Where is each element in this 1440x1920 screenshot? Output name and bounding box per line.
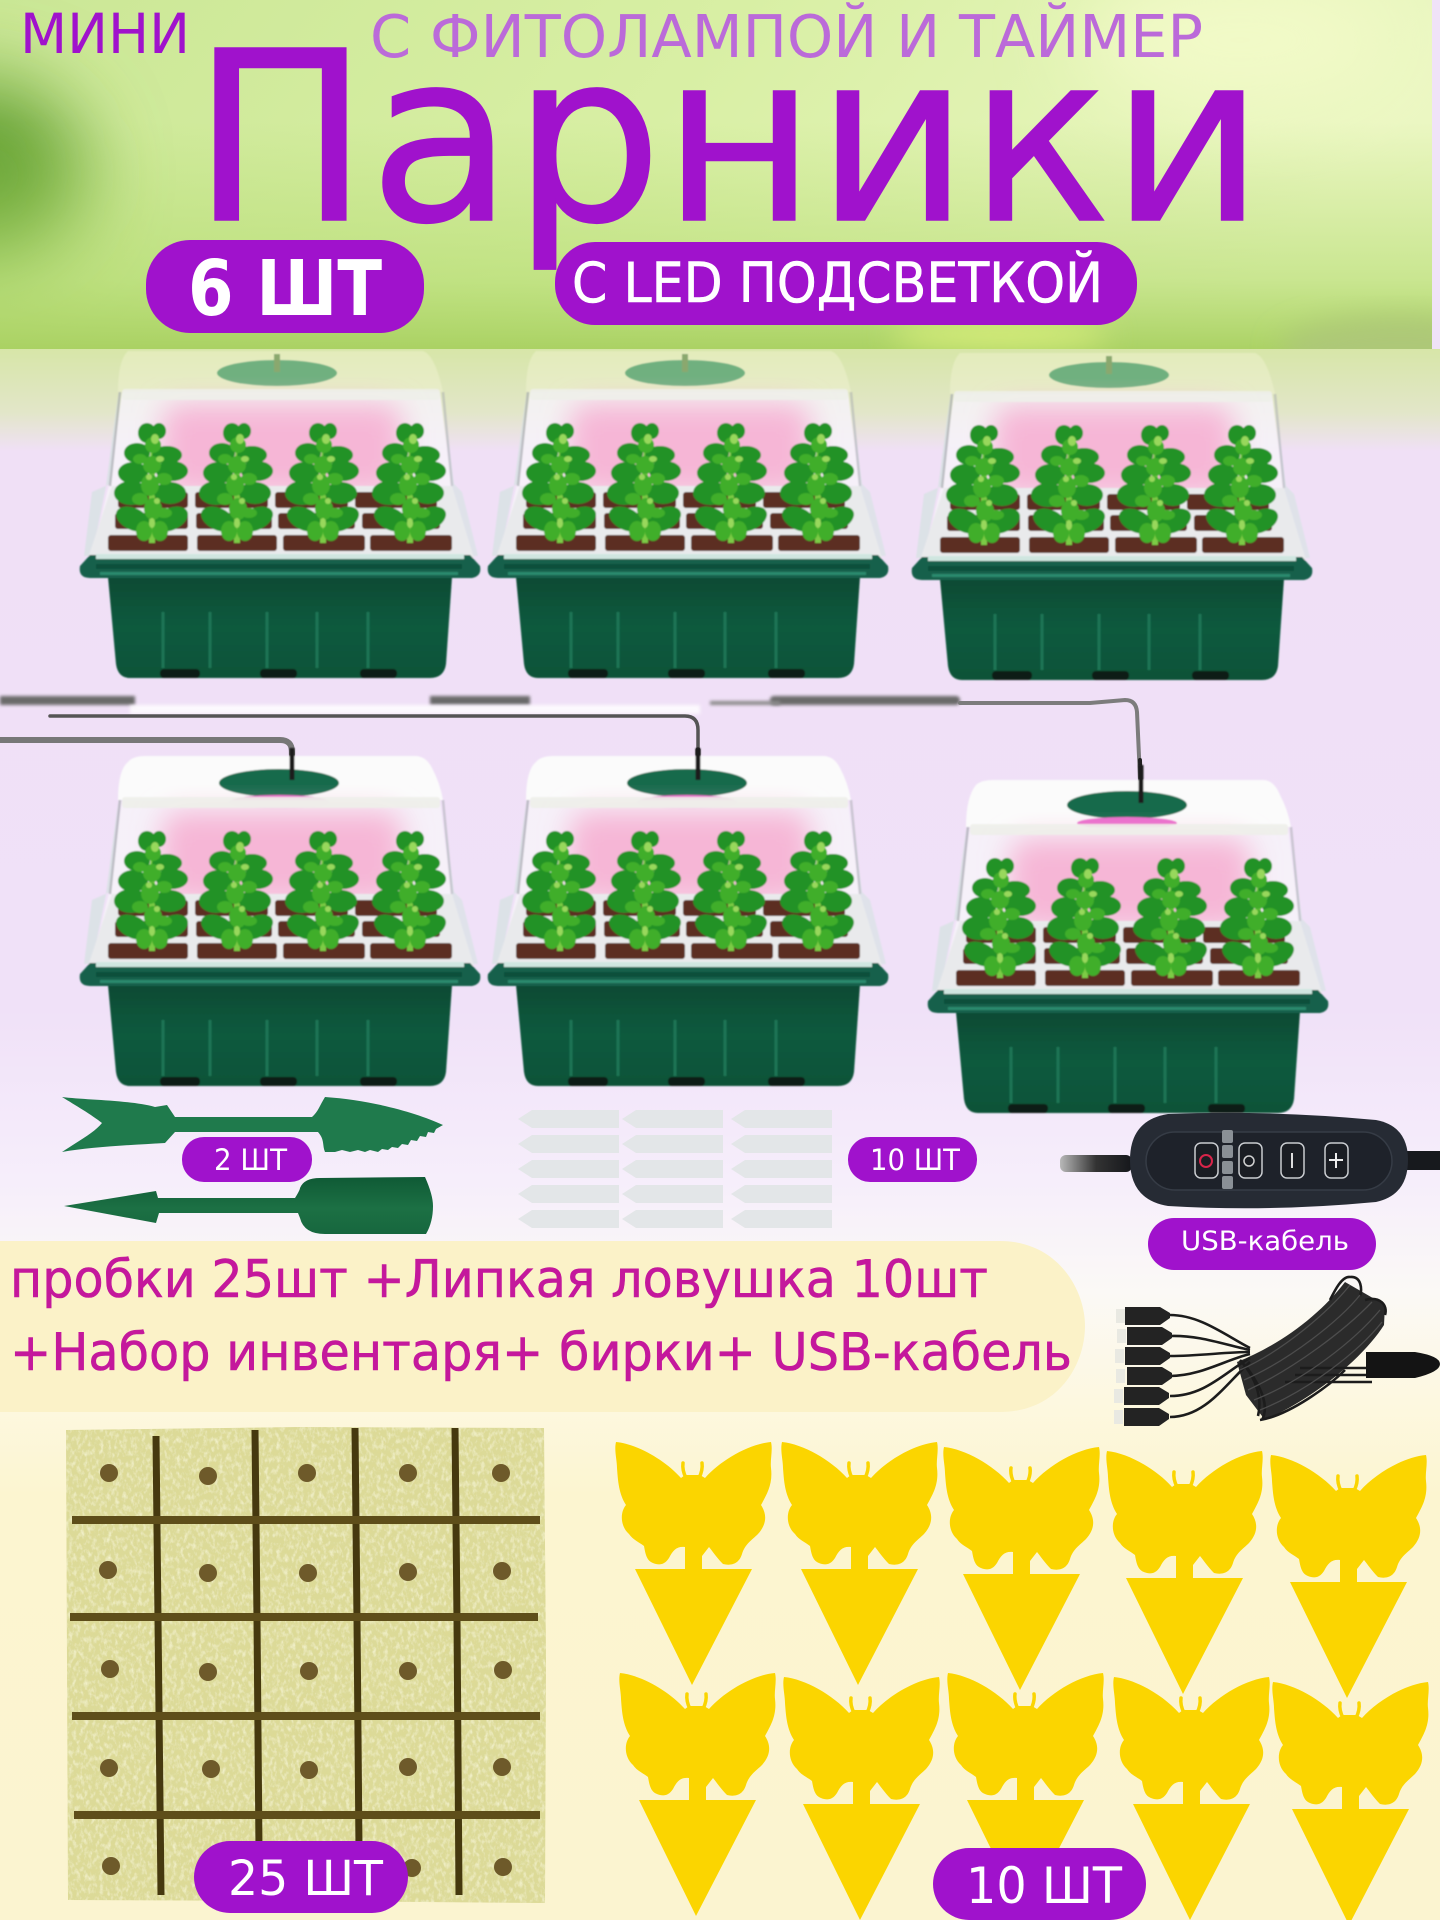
badge: 10 шт traps: 10 ШТ xyxy=(966,1857,1122,1915)
badge: usb-кабель xyxy=(1148,1218,1376,1270)
greenhouse 5 xyxy=(488,748,888,1086)
text panel: kit contents: +Набор инвентаря+ бирки+ USB-кабель xyxy=(10,1323,1072,1383)
greenhouse 4 xyxy=(80,748,480,1086)
greenhouse 1 xyxy=(80,351,480,678)
tool: fork and serrated spade xyxy=(62,1097,443,1152)
badge: с led подсветкой: С LED ПОДСВЕТКОЙ xyxy=(572,250,1103,315)
yellow sticky traps xyxy=(615,1442,1429,1920)
badge: 2 шт xyxy=(182,1137,312,1182)
plant labels set xyxy=(518,1110,832,1228)
badge: 2 шт: 2 ШТ xyxy=(214,1143,287,1177)
badge: 6 шт: 6 ШТ xyxy=(188,245,382,334)
greenhouse 2 xyxy=(488,351,888,678)
greenhouse 6 xyxy=(928,765,1328,1113)
title: парники: Парники xyxy=(192,1,1264,276)
badge: 10 шт labels xyxy=(848,1137,977,1182)
greenhouse 3 xyxy=(912,353,1312,680)
text panel: kit contents xyxy=(0,1241,1085,1412)
badge: 25 шт: 25 ШТ xyxy=(228,1851,384,1907)
text panel: kit contents: пробки 25шт +Липкая ловушка 10шт xyxy=(10,1250,988,1310)
badge: 25 шт xyxy=(194,1841,408,1913)
subtitle: с фитолампой и таймер: С ФИТОЛАМПОЙ И ТАЙМЕР xyxy=(370,2,1203,71)
rockwool plugs grid xyxy=(66,1427,546,1903)
cables between greenhouses xyxy=(0,696,1141,800)
timer controller xyxy=(1060,1113,1440,1208)
badge: 10 шт traps xyxy=(933,1848,1146,1920)
tool: dibber and scoop xyxy=(64,1177,433,1234)
badge: usb-кабель: USB-кабель xyxy=(1181,1226,1349,1257)
header green background xyxy=(0,0,1440,384)
small heading: мини: МИНИ xyxy=(20,2,190,66)
usb splitter cable xyxy=(1114,1277,1440,1426)
badge: 10 шт labels: 10 ШТ xyxy=(870,1143,960,1177)
